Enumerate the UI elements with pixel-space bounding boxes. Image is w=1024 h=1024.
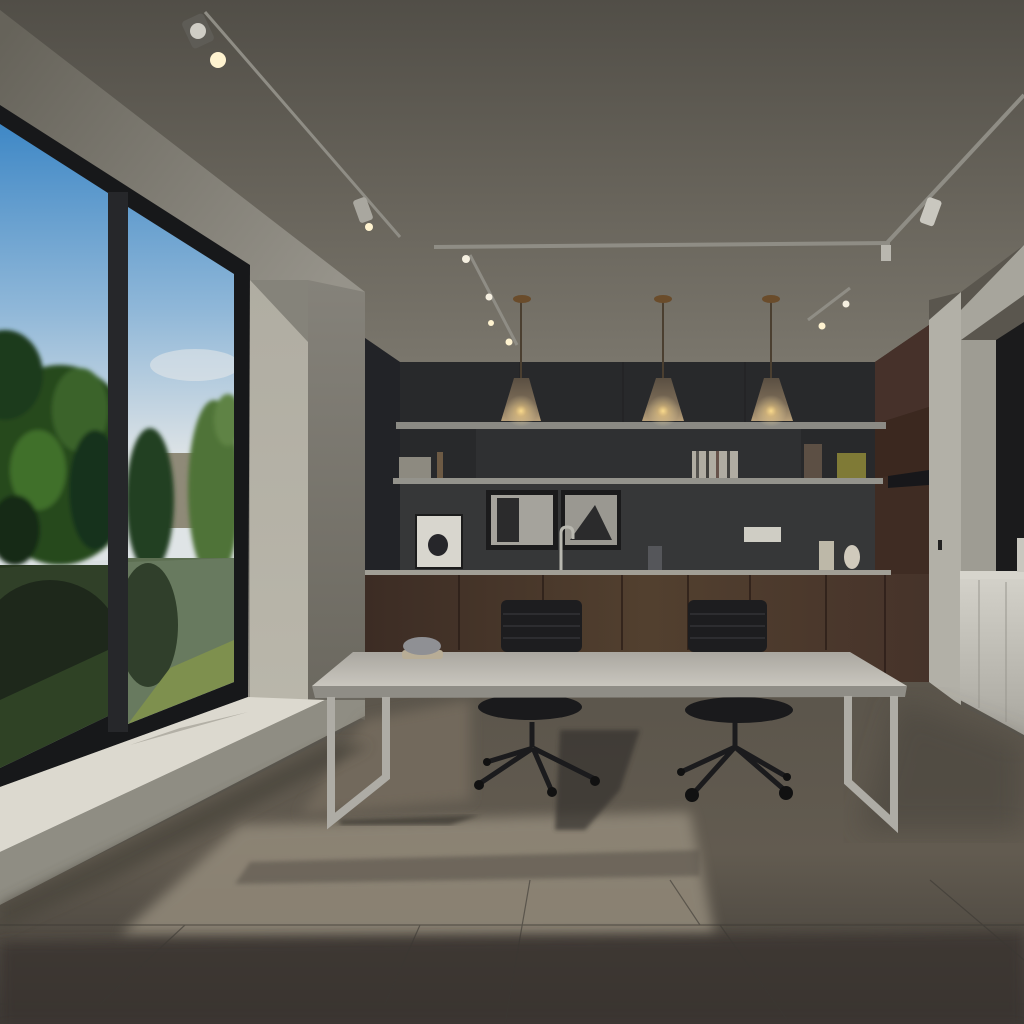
table shadow on floor — [340, 815, 480, 825]
window sill — [0, 697, 365, 905]
books — [399, 444, 866, 478]
right wood wall — [875, 325, 929, 685]
right partition — [929, 245, 1024, 735]
view through right pane — [128, 207, 234, 724]
left wall — [0, 10, 365, 900]
track lights — [181, 12, 1024, 346]
sunlight patches — [120, 812, 715, 935]
window — [0, 105, 250, 787]
framed pictures — [416, 490, 621, 568]
floor — [0, 682, 1024, 1024]
pendant lamps — [501, 295, 793, 427]
view through left pane — [0, 124, 108, 768]
wall outlet and counter objects — [561, 527, 860, 570]
right chair — [677, 600, 793, 802]
shelves — [393, 422, 886, 484]
table — [312, 637, 907, 824]
object on table — [402, 637, 443, 659]
ceiling — [0, 0, 1024, 362]
back wall — [365, 338, 876, 574]
left chair — [474, 600, 600, 797]
base cabinets — [365, 570, 929, 682]
